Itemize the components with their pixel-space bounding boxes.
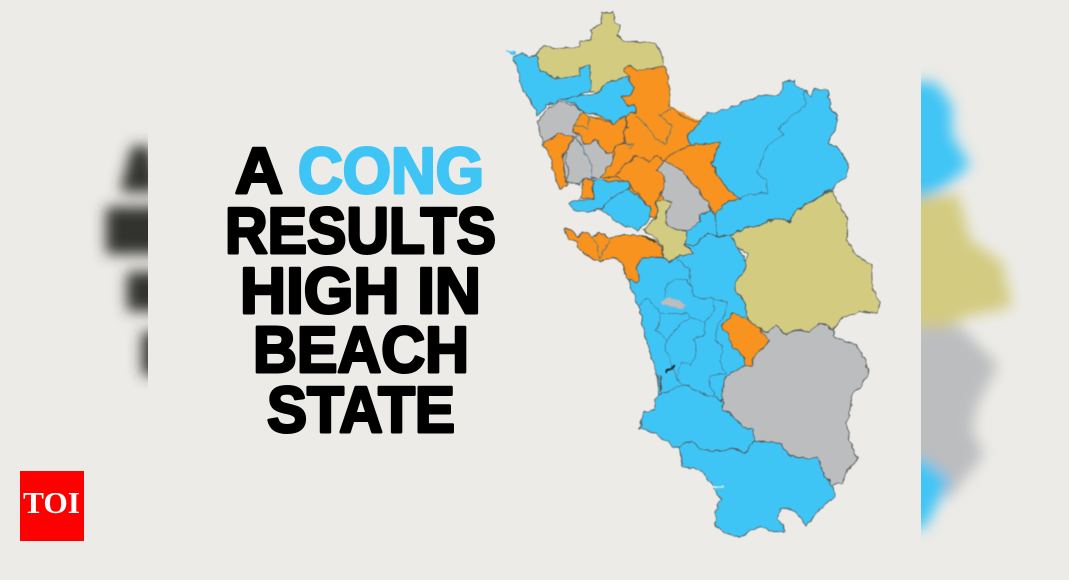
- river bits: [642, 236, 655, 242]
- underlay: orange core: [580, 107, 740, 217]
- map of Goa by constituency: [506, 12, 880, 538]
- TOI logo: [20, 471, 84, 541]
- estuary: [666, 365, 675, 372]
- headline line 2: RESULTS: [225, 194, 496, 267]
- TOI logo: TOI: [23, 485, 80, 520]
- region: gray Sanguem: [722, 323, 869, 485]
- region: orange coast: [543, 133, 573, 188]
- region: orange small: [580, 178, 593, 198]
- lake: [660, 297, 686, 308]
- small north-west island: [506, 50, 516, 55]
- region: blue strip: [560, 77, 636, 124]
- river mouth: [659, 376, 661, 392]
- region: gray inland: [565, 137, 613, 185]
- region: orange Tiswadi: [564, 229, 663, 283]
- blurred right edge: enlarged map: [900, 82, 1012, 532]
- underlay: gray core: [543, 107, 613, 185]
- region: orange east: [665, 143, 740, 215]
- headline: [225, 134, 496, 446]
- region: blue Sattari: [687, 79, 848, 237]
- blurred left edge: enlarged headline: [94, 134, 148, 386]
- region: blue Canacona: [680, 441, 835, 538]
- region: blue northwest coast: [513, 53, 591, 115]
- headline line 1: CONG: [298, 134, 484, 207]
- headline line 4: BEACH: [253, 313, 469, 386]
- region: blue south central body: [628, 233, 760, 400]
- region: yellow center: [643, 200, 693, 263]
- region: gray coast: [537, 102, 583, 144]
- region: orange middle: [615, 155, 666, 218]
- north map districts: [513, 12, 848, 247]
- region: yellow east: [730, 190, 880, 335]
- headline line 3: HIGH IN: [240, 254, 481, 327]
- region: blue Mandovi east: [602, 188, 650, 230]
- region: orange west: [574, 112, 628, 153]
- south map districts: [638, 270, 869, 538]
- notch: [712, 485, 723, 490]
- region: orange Sanguem west: [722, 313, 770, 367]
- region: blue Mormugao south: [640, 385, 753, 453]
- region: gray central: [657, 160, 710, 232]
- headline line 5: STATE: [267, 373, 455, 446]
- region: northern yellow: [537, 12, 663, 95]
- district dividers: [574, 90, 805, 280]
- headline line 1: A: [235, 134, 283, 207]
- region: blue connector: [685, 212, 717, 247]
- region: blue Mandovi north bank: [568, 180, 630, 212]
- constituency lines north: [506, 50, 805, 280]
- constituency lines south: [638, 270, 727, 397]
- region: orange central north: [600, 66, 702, 178]
